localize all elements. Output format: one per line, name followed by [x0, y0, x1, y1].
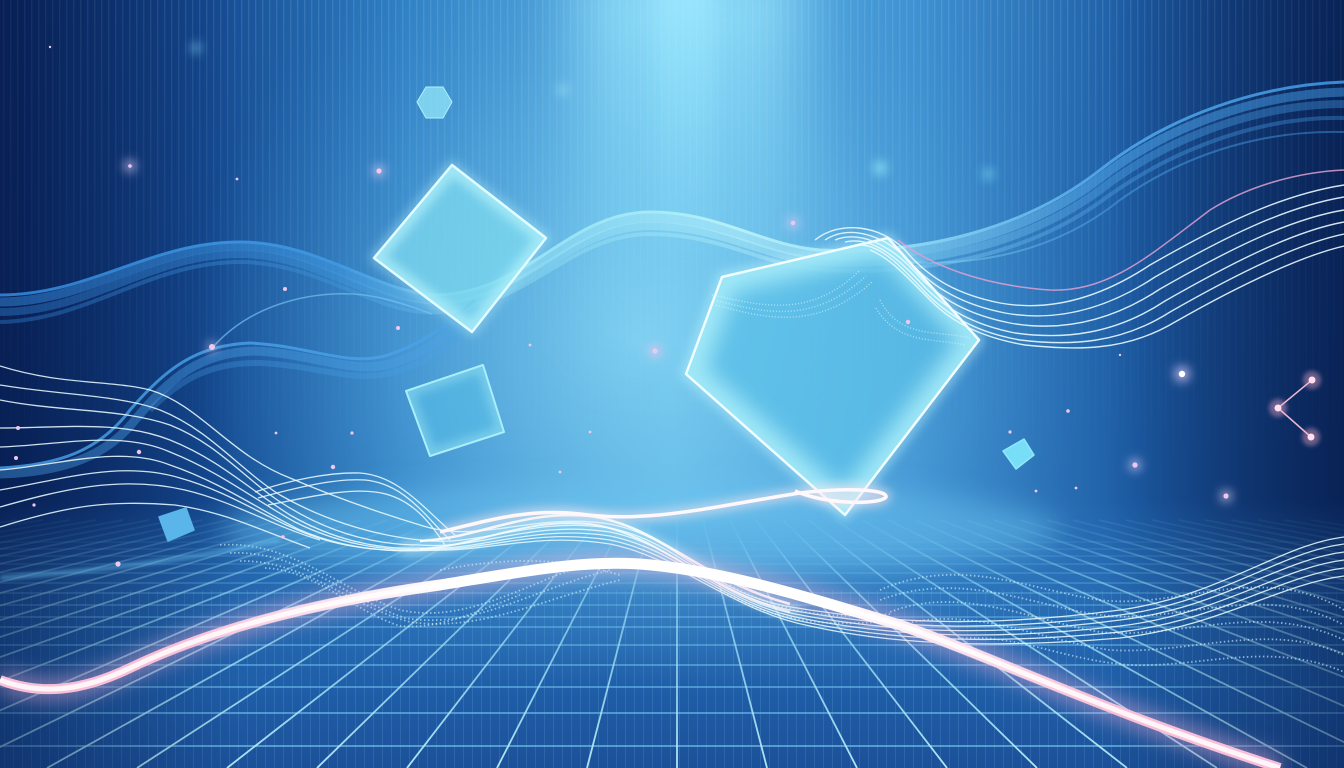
- glass polygon: large pentagon: [686, 238, 979, 515]
- network constellation icon: [1269, 371, 1321, 446]
- glass polygon: small hexagon: [417, 87, 452, 118]
- ribbon: main pink glow line: [0, 563, 1280, 768]
- dotted mesh waves: [220, 545, 1344, 672]
- wave: white lines left to right: [0, 366, 1344, 644]
- glass polygon: small right square: [1003, 439, 1034, 469]
- perspective floor grid: [0, 485, 1344, 768]
- glowing particles: [14, 43, 1232, 567]
- wave: right line bundle: [815, 185, 1344, 348]
- wave: bright white centre bundle: [400, 515, 800, 612]
- ribbon: upper glowing loop: [440, 490, 886, 532]
- glass polygon: small left square: [159, 508, 194, 541]
- glass polygon: upper diamond: [374, 165, 546, 332]
- blue horizon wisp: [0, 540, 280, 578]
- wave: lower blue ribbon: [0, 294, 485, 474]
- central light beam: [3, 0, 1342, 294]
- wave: upper blue ribbon: [0, 82, 1344, 322]
- wave: thin pink line: [898, 170, 1344, 290]
- glass polygon: lower square: [406, 365, 504, 456]
